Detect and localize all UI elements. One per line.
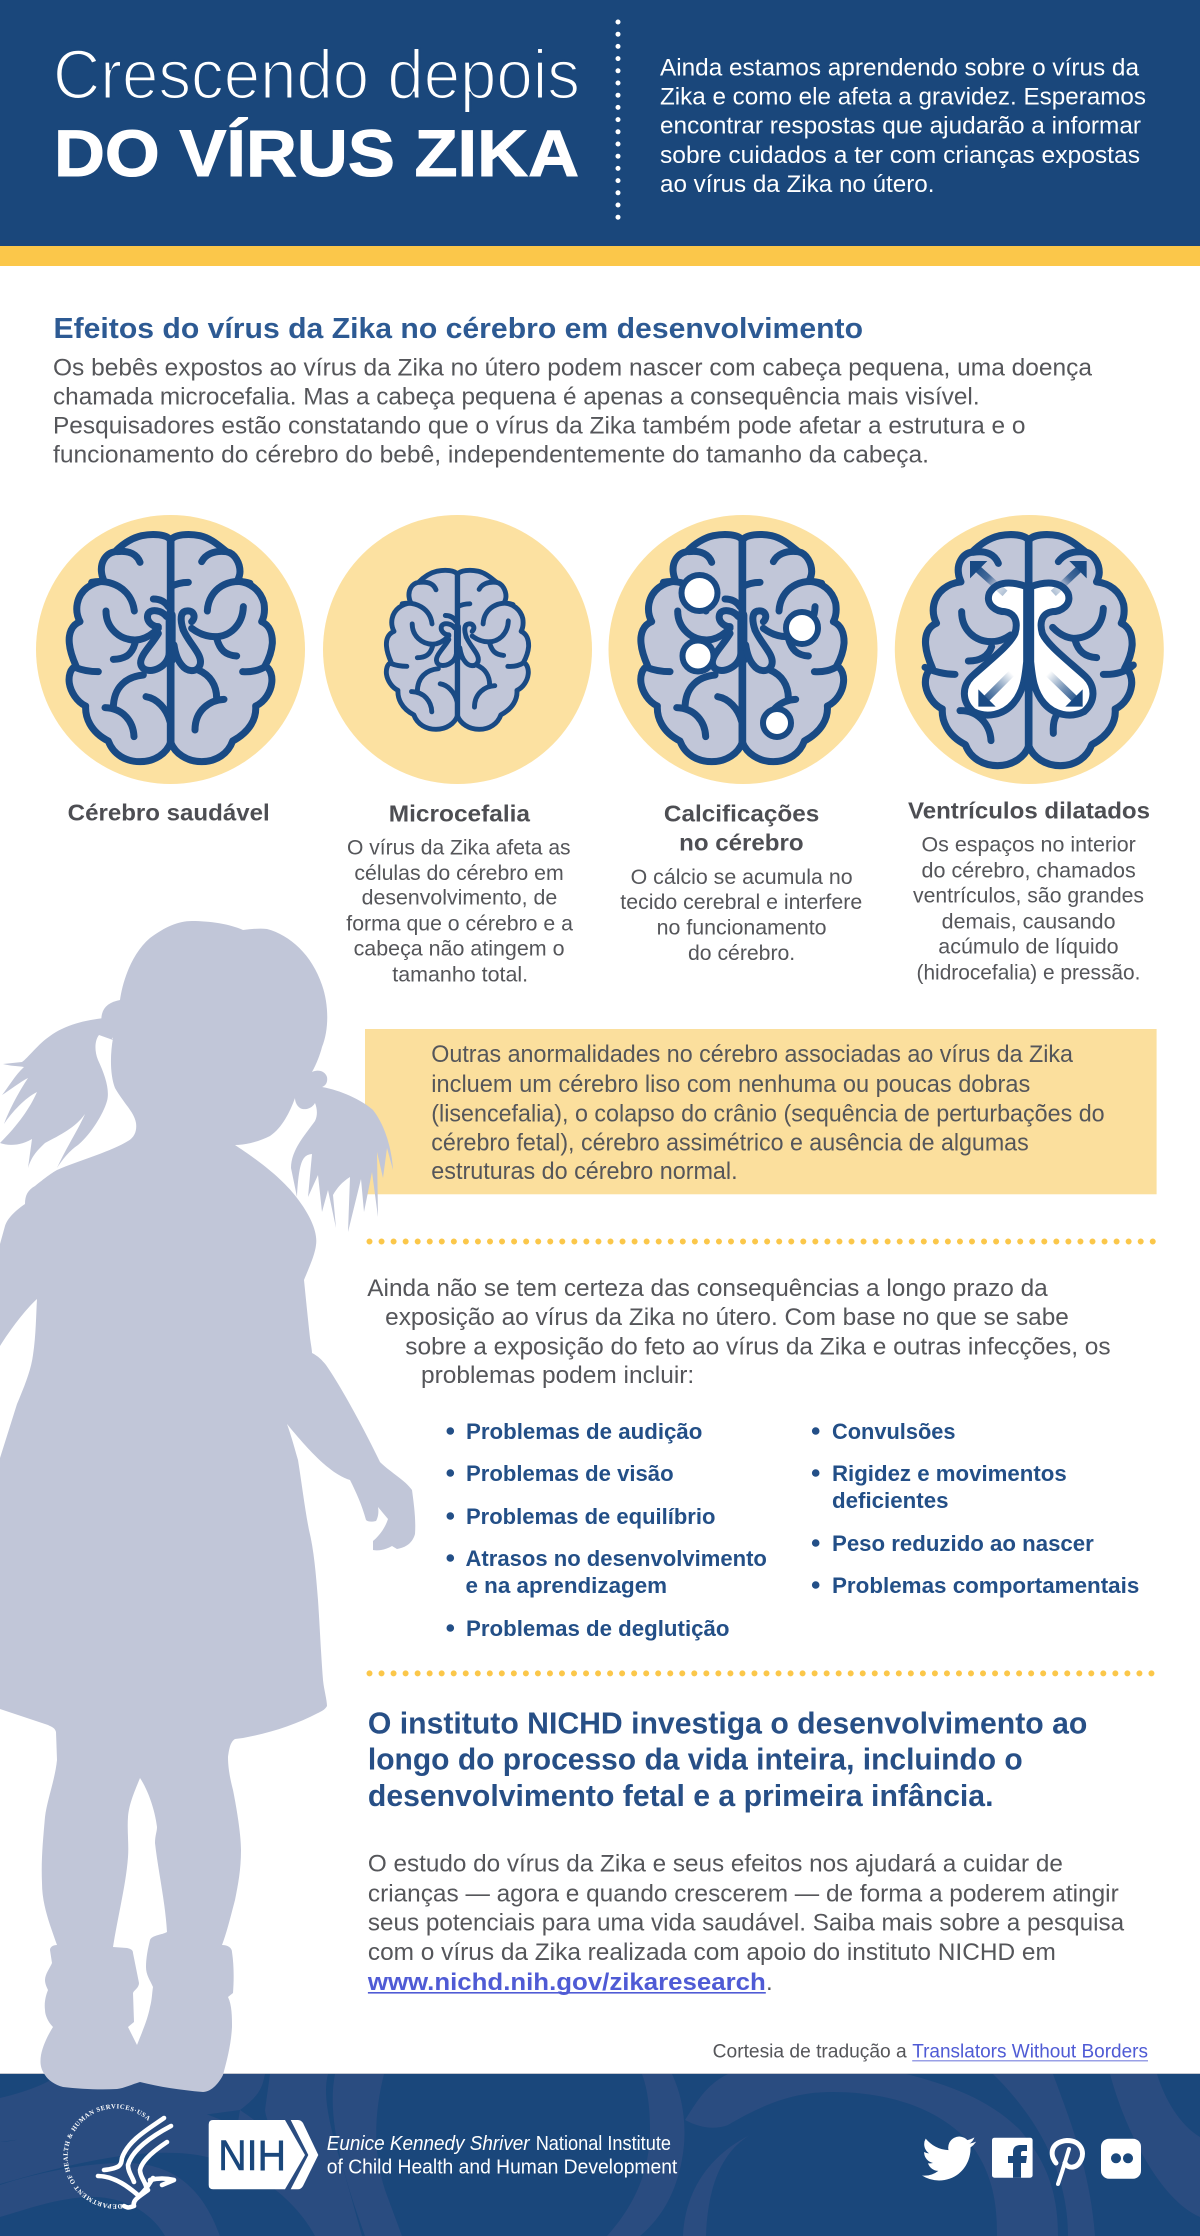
brain panel: enlarged ventricles	[895, 515, 1164, 984]
description: microcephaly: tamanho total.	[392, 964, 528, 987]
institute name: National Institute	[536, 2133, 671, 2155]
label: calcifications	[664, 801, 819, 856]
description: enlarged ventricles: do cérebro, chamados	[922, 859, 1136, 882]
header intro text: Ainda estamos aprendendo sobre o vírus da	[660, 55, 1140, 82]
description: enlarged ventricles: (hidrocefalia) e pressão.	[916, 961, 1140, 984]
text block: research: crianças — agora e quando crescerem — de forma a poderem atingir	[368, 1881, 1119, 1908]
description: microcephaly: cabeça não atingem o	[354, 938, 564, 961]
list: problems column 1: Atrasos no desenvolvimento	[466, 1546, 767, 1571]
footer	[0, 2073, 1200, 2236]
institute name: of Child Health and Human Development	[327, 2157, 678, 2179]
list: problems column 2: Problemas comportamentais	[832, 1573, 1139, 1598]
heading: NICHD	[368, 1705, 1087, 1813]
callout: other abnormalities: cérebro fetal), cérebro assimétrico e ausência de algumas	[431, 1130, 1029, 1156]
icon: brain with enlarged ventricles	[895, 515, 1164, 784]
header accent bar	[0, 246, 1200, 266]
label: calcifications: no cérebro	[679, 830, 804, 856]
list: problems column 2	[812, 1419, 1139, 1598]
title: DO VÍRUS ZIKA	[54, 116, 579, 190]
logo: NIH: NIH	[218, 2133, 286, 2180]
brain panel: microcephaly	[323, 515, 592, 987]
icon: brain with calcifications	[608, 515, 878, 784]
callout: other abnormalities: Outras anormalidades no cérebro associadas ao vírus da Zika	[431, 1041, 1074, 1068]
description: microcephaly	[346, 836, 573, 987]
description: calcifications: tecido cerebral e interfere	[620, 891, 862, 914]
icon: flickr	[1101, 2139, 1141, 2179]
logo: HHS seal: DEPARTMENT OF HEALTH & HUMAN SERVICES·USA	[63, 2104, 150, 2209]
intro paragraph: funcionamento do cérebro do bebê, independentemente do tamanho da cabeça.	[53, 442, 929, 469]
list: problems column 1: Problemas de equilíbrio	[466, 1504, 715, 1529]
institute name: Eunice Kennedy Shriver	[327, 2133, 531, 2155]
brain panel: calcifications	[608, 515, 878, 965]
icon: twitter	[922, 2137, 976, 2180]
text block: long-term consequences: problemas podem incluir:	[421, 1362, 694, 1389]
list: problems column 1: e na aprendizagem	[466, 1573, 667, 1598]
list: problems column 2: deficientes	[832, 1488, 948, 1513]
description: calcifications	[620, 866, 862, 965]
list: problems column 1: Problemas de audição	[466, 1419, 702, 1444]
intro paragraph: Pesquisadores estão constatando que o vírus da Zika também pode afetar a estrutura e o	[53, 413, 1026, 440]
label: microcephaly: Microcefalia	[389, 801, 531, 827]
brain panel: healthy brain	[36, 515, 305, 826]
description: microcephaly: forma que o cérebro e a	[346, 913, 573, 936]
callout: other abnormalities: (lisencefalia), o colapso do crânio (sequência de perturbações do	[431, 1100, 1105, 1127]
illustration: child silhouette	[0, 921, 415, 2092]
text block: long-term consequences: exposição ao vírus da Zika no útero. Com base no que se sabe	[385, 1304, 1069, 1331]
description: enlarged ventricles: acúmulo de líquido	[938, 935, 1119, 958]
icon: pinterest	[1052, 2140, 1082, 2184]
list: problems column 1: Problemas de visão	[466, 1461, 674, 1486]
text block: long-term consequences: sobre a exposição do feto ao vírus da Zika e outras infecções, os	[405, 1333, 1111, 1360]
text block: long-term consequences: Ainda não se tem certeza das consequências a longo prazo da	[367, 1275, 1048, 1302]
header intro text: encontrar respostas que ajudarão a informar	[660, 113, 1141, 140]
text block: research: com o vírus da Zika realizada com apoio do instituto NICHD em	[368, 1939, 1056, 1966]
text block: research	[367, 1851, 1125, 1996]
label: healthy brain: Cérebro saudável	[68, 800, 270, 826]
description: calcifications: do cérebro.	[688, 942, 795, 965]
description: enlarged ventricles	[913, 834, 1144, 984]
list: problems column 1: Problemas de deglutição	[466, 1616, 730, 1641]
intro paragraph	[53, 355, 1093, 469]
description: enlarged ventricles: ventrículos, são grandes	[913, 885, 1144, 908]
icon: healthy brain	[36, 515, 305, 784]
callout: other abnormalities: estruturas do cérebro normal.	[431, 1158, 738, 1185]
intro paragraph: chamada microcefalia. Mas a cabeça pequena é apenas a consequência mais visível.	[53, 384, 980, 411]
icon: small brain	[323, 515, 592, 784]
icon: facebook	[992, 2138, 1033, 2178]
header intro text	[660, 55, 1146, 198]
header intro text: sobre cuidados a ter com crianças expostas	[660, 142, 1140, 169]
callout: other abnormalities: incluem um cérebro liso com nenhuma ou poucas dobras	[431, 1071, 1030, 1098]
heading: NICHD: O instituto NICHD investiga o desenvolvimento ao	[368, 1705, 1087, 1740]
text block: research: seus potenciais para uma vida saudável. Saiba mais sobre a pesquisa	[368, 1910, 1125, 1937]
description: microcephaly: O vírus da Zika afeta as	[347, 836, 571, 859]
text block: research: www.nichd.nih.gov/zikaresearch	[367, 1969, 766, 1996]
heading: NICHD: longo do processo da vida inteira, incluindo o	[368, 1741, 1023, 1776]
description: calcifications: O cálcio se acumula no	[631, 866, 853, 889]
description: microcephaly: desenvolvimento, de	[362, 887, 557, 910]
heading: NICHD: desenvolvimento fetal e a primeira infância.	[368, 1778, 993, 1813]
title: Crescendo depois	[53, 36, 580, 114]
intro paragraph: Os bebês expostos ao vírus da Zika no útero podem nascer com cabeça pequena, uma doença	[53, 355, 1093, 382]
list: problems column 1	[446, 1419, 767, 1641]
institute name	[327, 2133, 678, 2179]
text block: long-term consequences	[367, 1275, 1111, 1389]
description: calcifications: no funcionamento	[657, 917, 827, 940]
text block: research: .	[766, 1969, 773, 1996]
callout: other abnormalities	[365, 1029, 1157, 1194]
translation credit: Cortesia de tradução a	[713, 2042, 907, 2063]
header intro text: ao vírus da Zika no útero.	[660, 171, 934, 198]
header banner	[0, 0, 1200, 266]
section heading: Efeitos do vírus da Zika no cérebro em desenvolvimento	[54, 313, 863, 345]
label: enlarged ventricles: Ventrículos dilatados	[908, 797, 1150, 823]
description: enlarged ventricles: demais, causando	[942, 910, 1116, 933]
list: problems column 2: Peso reduzido ao nascer	[832, 1531, 1094, 1556]
translation credit	[713, 2042, 1148, 2063]
list: problems column 2: Rigidez e movimentos	[832, 1461, 1067, 1486]
description: enlarged ventricles: Os espaços no interior	[922, 834, 1136, 857]
logo: NIH	[209, 2120, 318, 2189]
label: calcifications: Calcificações	[664, 801, 819, 827]
translation credit: Translators Without Borders	[912, 2042, 1148, 2063]
header intro text: Zika e como ele afeta a gravidez. Esperamos	[660, 84, 1146, 111]
text block: research: O estudo do vírus da Zika e seus efeitos nos ajudará a cuidar de	[368, 1851, 1063, 1878]
title	[53, 36, 580, 190]
list: problems column 2: Convulsões	[832, 1419, 956, 1444]
description: microcephaly: células do cérebro em	[354, 862, 564, 885]
